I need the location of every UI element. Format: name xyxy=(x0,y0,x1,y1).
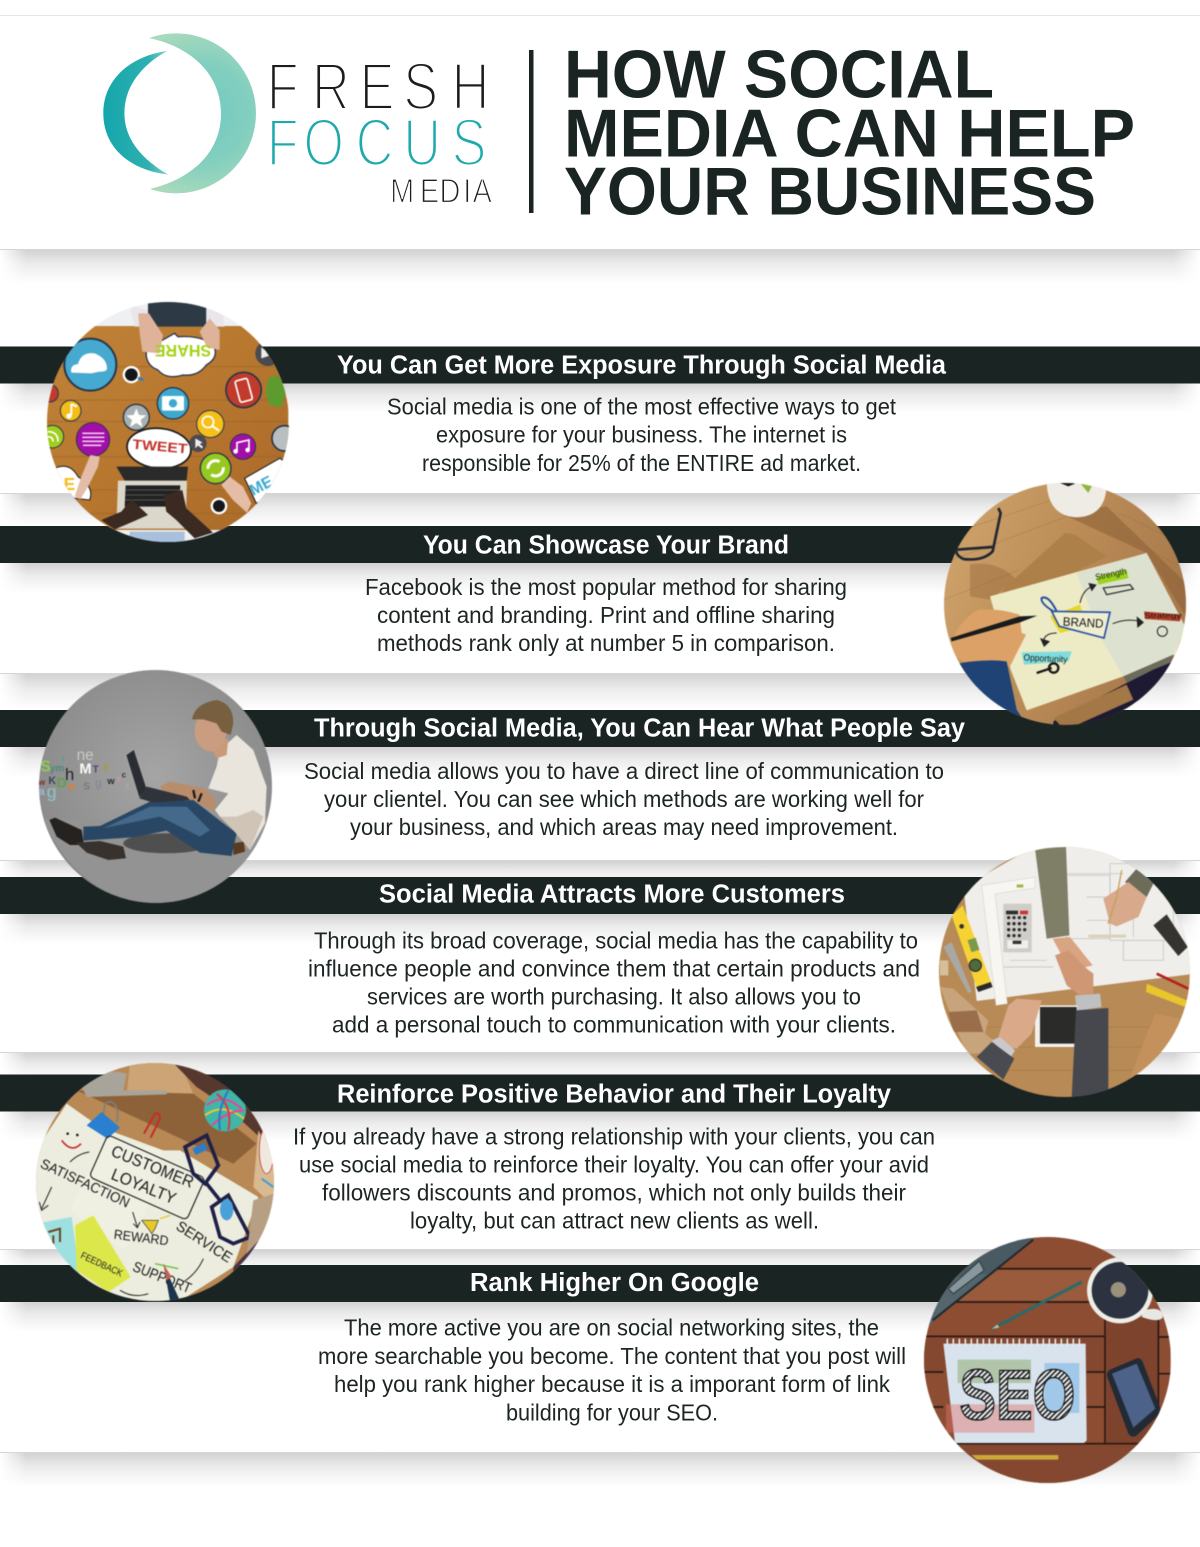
body text: The more active you are on social networking sites, the xyxy=(344,1315,879,1341)
body text: more searchable you become. The content that you post will xyxy=(318,1343,906,1369)
photo: notebook with brand sketch: Strength xyxy=(1094,566,1127,583)
photo: social media icons on a wooden desk: ME xyxy=(247,473,277,500)
photo: man with laptop sitting on the floor: S xyxy=(41,759,51,776)
body text: your business, and which areas may need improvement. xyxy=(350,814,898,840)
body text: If you already have a strong relationship with your clients, you can xyxy=(293,1124,935,1150)
heading bar xyxy=(0,526,1200,563)
body text: building for your SEO. xyxy=(506,1399,718,1425)
photo: social media icons on a wooden desk: SHARE xyxy=(155,341,212,360)
photo: notebook with brand sketch: Opportunity xyxy=(1023,653,1068,665)
heading bar xyxy=(0,710,1200,747)
heading: You Can Showcase Your Brand xyxy=(423,532,789,560)
photo: SEO notebook on wooden table xyxy=(923,1236,1172,1484)
photo: customer loyalty sketch on notebook: CUSTOMER xyxy=(109,1141,197,1191)
logo word: FRESH: FRESH xyxy=(267,49,489,124)
photo: man with laptop sitting on the floor xyxy=(38,669,273,904)
body text: your clientel. You can see which methods are working well for xyxy=(324,786,924,812)
panel: attracts more customers xyxy=(0,877,1200,1038)
photo: customer loyalty sketch on notebook: SATISFACTION xyxy=(38,1155,132,1210)
photo: man with laptop sitting on the floor: y xyxy=(117,773,122,783)
photo: notebook with brand sketch: Strategy xyxy=(1144,611,1182,620)
body text xyxy=(387,394,897,476)
header divider xyxy=(529,50,534,213)
logo word: FOCUS: FOCUS xyxy=(267,105,486,180)
body text: influence people and convince them that certain products and xyxy=(308,956,920,982)
photo: man with laptop sitting on the floor: D xyxy=(57,774,67,790)
panel: reinforce loyalty xyxy=(0,1074,1200,1234)
photo: man with laptop sitting on the floor: ne xyxy=(77,747,94,764)
photo: SEO notebook on wooden table: SEO xyxy=(959,1355,1075,1435)
body text xyxy=(293,1124,935,1234)
body text: Through its broad coverage, social media has the capability to xyxy=(314,928,918,954)
heading: Social Media Attracts More Customers xyxy=(379,880,845,908)
title: YOUR BUSINESS xyxy=(564,154,1096,230)
body text: followers discounts and promos, which not only builds their xyxy=(322,1180,906,1206)
photo: man with laptop sitting on the floor: c xyxy=(122,770,127,779)
body text xyxy=(308,928,920,1038)
panel: rank higher on Google xyxy=(0,1265,1200,1425)
body text: Social media is one of the most effective ways to get xyxy=(387,394,897,420)
photo: man with laptop sitting on the floor: g xyxy=(47,781,57,801)
body text xyxy=(304,758,944,840)
photo: business handshake over blueprints xyxy=(938,846,1190,1098)
body text: responsible for 25% of the ENTIRE ad market. xyxy=(422,450,861,476)
body text: use social media to reinforce their loyalty. You can offer your avid xyxy=(299,1152,929,1178)
body text: loyalty, but can attract new clients as well. xyxy=(410,1208,819,1234)
photo: man with laptop sitting on the floor: z xyxy=(125,781,129,790)
panel: more exposure xyxy=(0,346,1200,476)
photo: man with laptop sitting on the floor: M xyxy=(79,761,92,777)
photo: man with laptop sitting on the floor: h xyxy=(65,765,74,784)
panel: showcase your brand xyxy=(0,526,1200,656)
heading bar xyxy=(0,1074,1200,1112)
photo: customer loyalty sketch on notebook xyxy=(36,1062,275,1302)
photo: notebook with brand sketch xyxy=(943,482,1187,726)
body text: methods rank only at number 5 in comparison. xyxy=(377,630,835,656)
photo: customer loyalty sketch on notebook: SUPPORT xyxy=(130,1259,193,1297)
photo: man with laptop sitting on the floor: T xyxy=(93,765,99,776)
body text: exposure for your business. The internet is xyxy=(436,422,847,448)
panel: hear what people say xyxy=(0,710,1200,840)
photo: customer loyalty sketch on notebook: FEEDBACK xyxy=(79,1250,125,1279)
heading: You Can Get More Exposure Through Social Media xyxy=(337,351,947,379)
body text: help you rank higher because it is a imporant form of link xyxy=(334,1371,890,1397)
photo: man with laptop sitting on the floor: w xyxy=(106,776,115,786)
logo: Fresh Focus Media xyxy=(103,33,492,210)
title xyxy=(564,36,1135,230)
body text: content and branding. Print and offline sharing xyxy=(377,602,835,628)
photo: social media icons on a wooden desk xyxy=(46,301,290,543)
heading bar xyxy=(0,877,1200,914)
title: HOW SOCIAL xyxy=(564,36,994,112)
body text: add a personal touch to communication with your clients. xyxy=(332,1012,896,1038)
photo: social media icons on a wooden desk: E xyxy=(64,474,76,494)
photo: man with laptop sitting on the floor: 8 xyxy=(103,764,109,775)
icon: crescent ring xyxy=(103,33,256,193)
heading bar xyxy=(0,346,1200,384)
photo: customer loyalty sketch on notebook: SERVICE xyxy=(173,1218,235,1266)
photo: customer loyalty sketch on notebook: REWARD xyxy=(113,1226,169,1248)
photo: man with laptop sitting on the floor: g xyxy=(95,778,102,790)
body text xyxy=(318,1315,906,1425)
body text: Social media allows you to have a direct line of communication to xyxy=(304,758,944,784)
body text: Facebook is the most popular method for sharing xyxy=(365,574,847,600)
photo: man with laptop sitting on the floor: S xyxy=(83,781,90,792)
photo: man with laptop sitting on the floor: ym xyxy=(50,764,65,775)
photo: man with laptop sitting on the floor: e xyxy=(68,781,75,793)
photo: man with laptop sitting on the floor: r xyxy=(62,754,66,764)
title: MEDIA CAN HELP xyxy=(564,96,1135,172)
heading: Rank Higher On Google xyxy=(470,1269,759,1297)
photo: customer loyalty sketch on notebook: LOYALTY xyxy=(109,1164,179,1208)
heading: Reinforce Positive Behavior and Their Loyalty xyxy=(337,1080,892,1108)
body text xyxy=(365,574,847,656)
photo: notebook with brand sketch: BRAND xyxy=(1063,615,1104,631)
photo: man with laptop sitting on the floor: K xyxy=(48,775,56,787)
heading: Through Social Media, You Can Hear What People Say xyxy=(314,714,966,742)
heading bar xyxy=(0,1265,1200,1302)
logo word: MEDIA: MEDIA xyxy=(390,171,492,210)
photo: social media icons on a wooden desk: TWEET xyxy=(132,437,189,457)
body text: services are worth purchasing. It also allows you to xyxy=(367,984,861,1010)
